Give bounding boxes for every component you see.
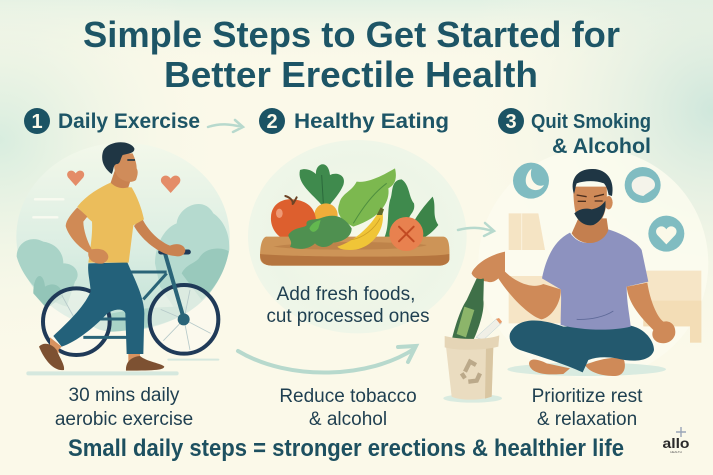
step 1 heading: Daily Exercise	[58, 110, 200, 133]
recycling bin	[446, 347, 493, 400]
step 2 heading: Healthy Eating	[294, 110, 449, 133]
orange	[314, 203, 338, 227]
illustration: man meditating and discarding bottle	[443, 148, 708, 403]
furniture background	[509, 213, 545, 250]
face	[114, 153, 138, 182]
t-shirt	[77, 183, 144, 263]
step 3 caption: & relaxation	[537, 409, 637, 430]
shadow and bin shadow	[507, 363, 666, 376]
broccoli	[288, 216, 352, 249]
title	[83, 14, 620, 95]
illustration: fresh food on board	[248, 140, 467, 333]
icon: brain	[625, 167, 661, 203]
step 2 caption: Add fresh foods,	[276, 284, 416, 305]
step 2 caption	[266, 284, 430, 327]
fingers over bottle	[472, 258, 498, 282]
hair	[102, 142, 134, 174]
ground shadows	[28, 367, 177, 379]
bin rim	[445, 335, 499, 350]
panel: step 1 daily exercise	[16, 108, 230, 430]
panel: step 3 quit smoking and alcohol	[443, 108, 708, 430]
panel: step 2 healthy eating	[248, 108, 467, 333]
recycling symbol	[462, 362, 480, 382]
logo: allo health: HEALTH	[670, 450, 682, 454]
crossed legs	[510, 321, 654, 372]
face	[573, 187, 607, 225]
step 1 caption: aerobic exercise	[55, 409, 193, 430]
feet	[529, 359, 570, 374]
leaves	[300, 164, 344, 207]
step 3 heading	[498, 108, 651, 158]
step 3 caption: Prioritize rest	[532, 386, 643, 407]
bottom takeaway: Small daily steps = stronger erections & healthier life	[68, 435, 624, 462]
green bottle	[452, 275, 484, 340]
bicycle	[43, 252, 218, 355]
caption: reduce tobacco and alcohol: Reduce tobacco	[279, 386, 417, 407]
step 3 heading: & Alcohol	[552, 135, 651, 158]
caption: reduce tobacco and alcohol	[279, 386, 417, 430]
step 2 heading: 2	[266, 111, 278, 133]
step 1 caption: 30 mins daily	[69, 385, 180, 406]
ear	[605, 196, 613, 209]
banana	[337, 213, 383, 250]
step 1 heading: 1	[31, 111, 43, 133]
t-shirt	[542, 229, 648, 330]
trousers	[53, 262, 144, 354]
beard	[574, 201, 606, 225]
logo: allo health	[662, 427, 690, 454]
step 2 caption: cut processed ones	[266, 306, 430, 327]
cigarette	[476, 319, 502, 340]
step 3 caption	[532, 386, 643, 430]
cutting board	[260, 237, 449, 266]
step 2 heading	[259, 108, 449, 134]
processed food crossed out	[389, 217, 423, 251]
logo: allo health: allo	[662, 435, 690, 451]
near arm	[66, 207, 108, 264]
icon: heart	[648, 216, 684, 252]
arrow: step 1 to step 2	[208, 120, 243, 132]
title: Simple Steps to Get Started for	[83, 14, 620, 55]
arrow: curved, step 1 to bin	[238, 346, 416, 373]
icon: hearts	[67, 171, 180, 193]
neck	[572, 218, 608, 243]
arrow: step 2 to step 3	[458, 223, 494, 236]
illustration: man walking with bicycle	[16, 142, 230, 373]
caption: reduce tobacco and alcohol: & alcohol	[309, 409, 387, 430]
icon: moon	[513, 163, 549, 199]
step 3 heading: Quit Smoking	[531, 111, 651, 133]
right arm	[627, 283, 675, 343]
far arm	[134, 217, 185, 256]
step 1 caption	[55, 385, 193, 430]
step 3 heading: 3	[505, 111, 517, 133]
left shoe and right shoe	[50, 337, 62, 353]
neck	[111, 170, 131, 188]
title: Better Erectile Health	[164, 54, 538, 95]
left arm reaching bottle	[472, 252, 561, 319]
hair	[573, 169, 613, 196]
apple	[271, 199, 316, 242]
